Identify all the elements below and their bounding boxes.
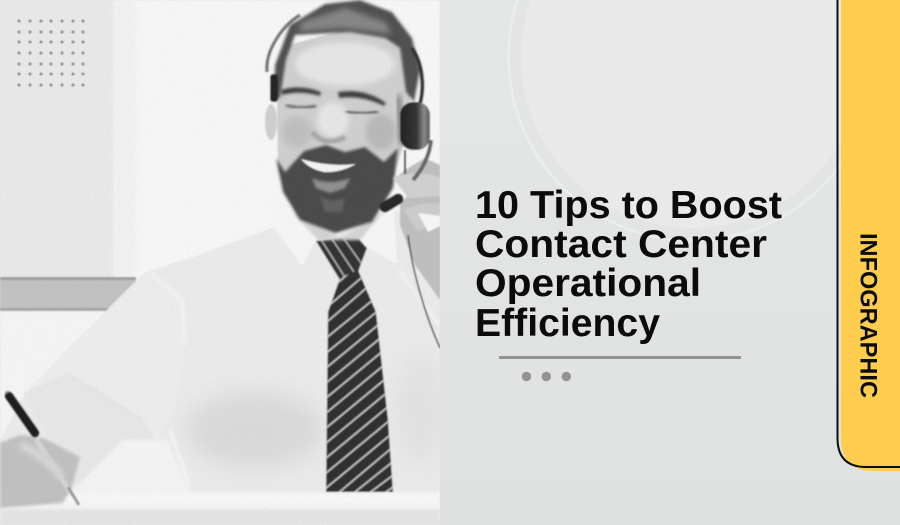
desk (58, 442, 440, 506)
three dots (522, 372, 571, 381)
face (277, 30, 410, 232)
collar (275, 213, 396, 264)
title: Contact Center (475, 223, 767, 266)
divider line (499, 356, 741, 359)
title: Operational (475, 262, 701, 305)
photo: man with headset (0, 0, 445, 525)
tab label: INFOGRAPHIC (854, 233, 882, 398)
title (475, 184, 782, 345)
eyebrows and eyes (281, 87, 386, 141)
headset (267, 15, 440, 348)
yellow tab (838, 0, 900, 471)
hand on microphone (393, 158, 440, 300)
decorative circle (507, 0, 877, 242)
hair (274, 0, 420, 102)
title: 10 Tips to Boost (475, 184, 782, 227)
tie (316, 236, 400, 500)
dot grid (18, 20, 84, 86)
writing hand and pen (0, 391, 80, 508)
mouth (301, 159, 356, 172)
shirt (1, 212, 440, 492)
ear (265, 104, 277, 140)
panel: grey right background (440, 0, 900, 525)
beard (276, 145, 398, 233)
title: Efficiency (475, 302, 660, 345)
photo background (0, 0, 440, 438)
